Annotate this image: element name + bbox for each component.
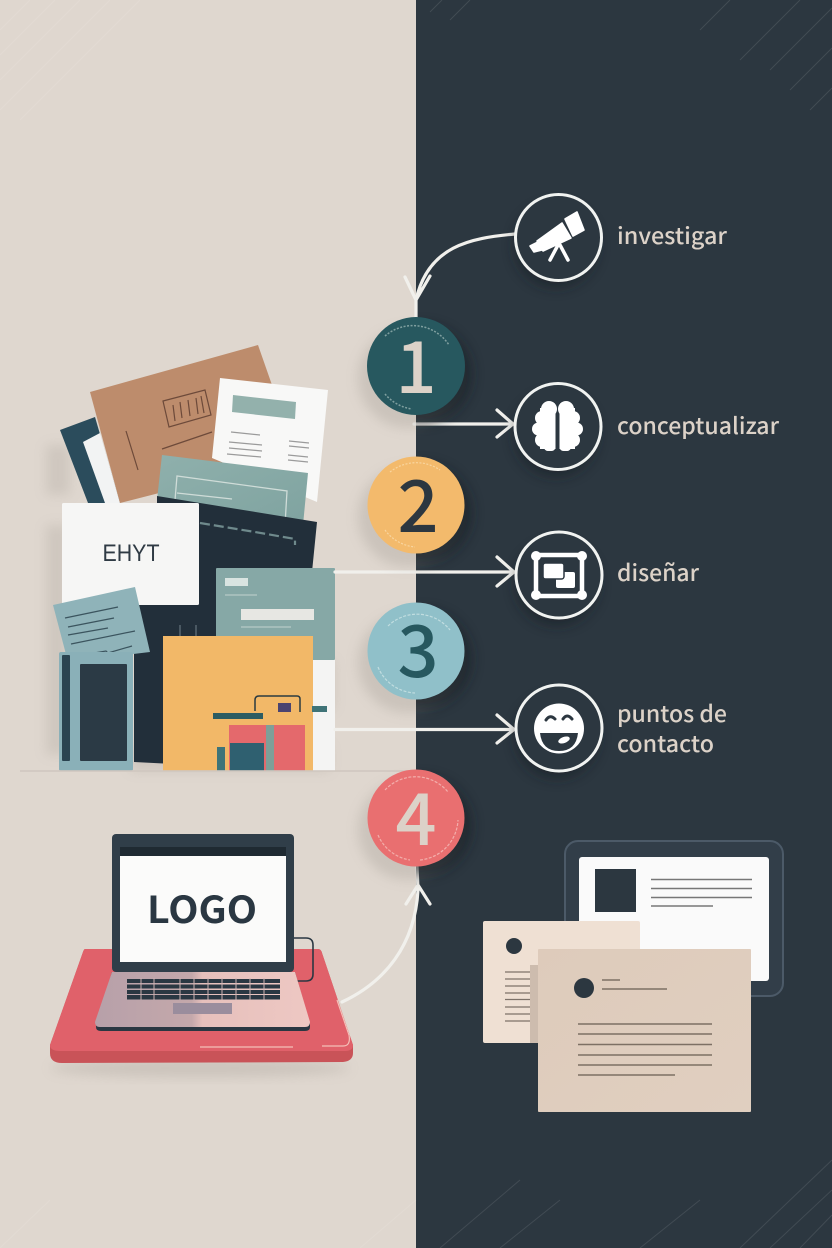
step icon: design frame bbox=[515, 532, 602, 626]
label: puntos de contacto: puntos de bbox=[617, 695, 727, 729]
stack of documents illustration bbox=[20, 345, 416, 772]
step 1 badge bbox=[358, 309, 472, 428]
laptop keyboard deck bbox=[95, 972, 310, 1031]
arrow: laptop to step 4 bbox=[342, 866, 430, 1002]
arrow: step 1 to conceptualizar bbox=[414, 410, 513, 437]
step 3 badge: 3 bbox=[397, 593, 439, 698]
step 2 badge bbox=[358, 448, 472, 567]
stack ground shadow bbox=[46, 445, 334, 771]
small teal note bbox=[53, 587, 150, 662]
red platform bbox=[50, 949, 353, 1063]
white sheet behind teal card bbox=[312, 655, 335, 771]
yellow folder with mini objects bbox=[163, 636, 327, 771]
step icon: telescope bbox=[514, 194, 602, 288]
dark folder bbox=[134, 496, 317, 771]
step icon: brain bbox=[514, 384, 601, 477]
label: puntos de contacto: contacto bbox=[617, 725, 714, 759]
step 4 badge bbox=[358, 761, 472, 880]
laptop screen: LOGO bbox=[147, 880, 257, 934]
white card with EHYT: EHYT bbox=[102, 540, 160, 567]
dark folder back left bbox=[60, 417, 120, 503]
white sheet in folder bbox=[83, 433, 120, 503]
brown envelope bbox=[90, 345, 275, 503]
background: right dark panel bbox=[416, 0, 832, 1248]
platform shadow bbox=[50, 1059, 350, 1077]
background: left beige panel bbox=[0, 0, 416, 1248]
label: investigar: investigar bbox=[617, 217, 728, 251]
arrow: stack to diseñar bbox=[335, 557, 514, 586]
laptop cable bbox=[286, 938, 313, 981]
step icon: smiling face bbox=[515, 685, 602, 779]
teal card right bbox=[216, 568, 335, 660]
label: diseñar: diseñar bbox=[617, 554, 700, 588]
white card with EHYT bbox=[62, 503, 199, 605]
documents illustration right bbox=[483, 841, 783, 1112]
teal document bbox=[157, 455, 308, 525]
tablet device bbox=[59, 652, 133, 771]
step 4 badge: 4 bbox=[395, 761, 437, 866]
white letter sheet bbox=[212, 378, 328, 502]
laptop screen bbox=[112, 834, 294, 972]
business card in dark frame bbox=[565, 841, 783, 996]
back beige letter bbox=[483, 921, 640, 1043]
step 2 badge: 2 bbox=[397, 448, 439, 553]
laptop on red platform bbox=[50, 834, 353, 1077]
step 1 badge: 1 bbox=[395, 309, 437, 414]
step 3 badge bbox=[358, 593, 472, 713]
label: conceptualizar: conceptualizar bbox=[617, 407, 780, 441]
arrow: stack to puntos de contacto bbox=[335, 715, 514, 743]
front beige letter bbox=[538, 949, 751, 1112]
arrow: investigar to step 1 bbox=[405, 234, 515, 318]
shelf line bbox=[20, 770, 416, 772]
